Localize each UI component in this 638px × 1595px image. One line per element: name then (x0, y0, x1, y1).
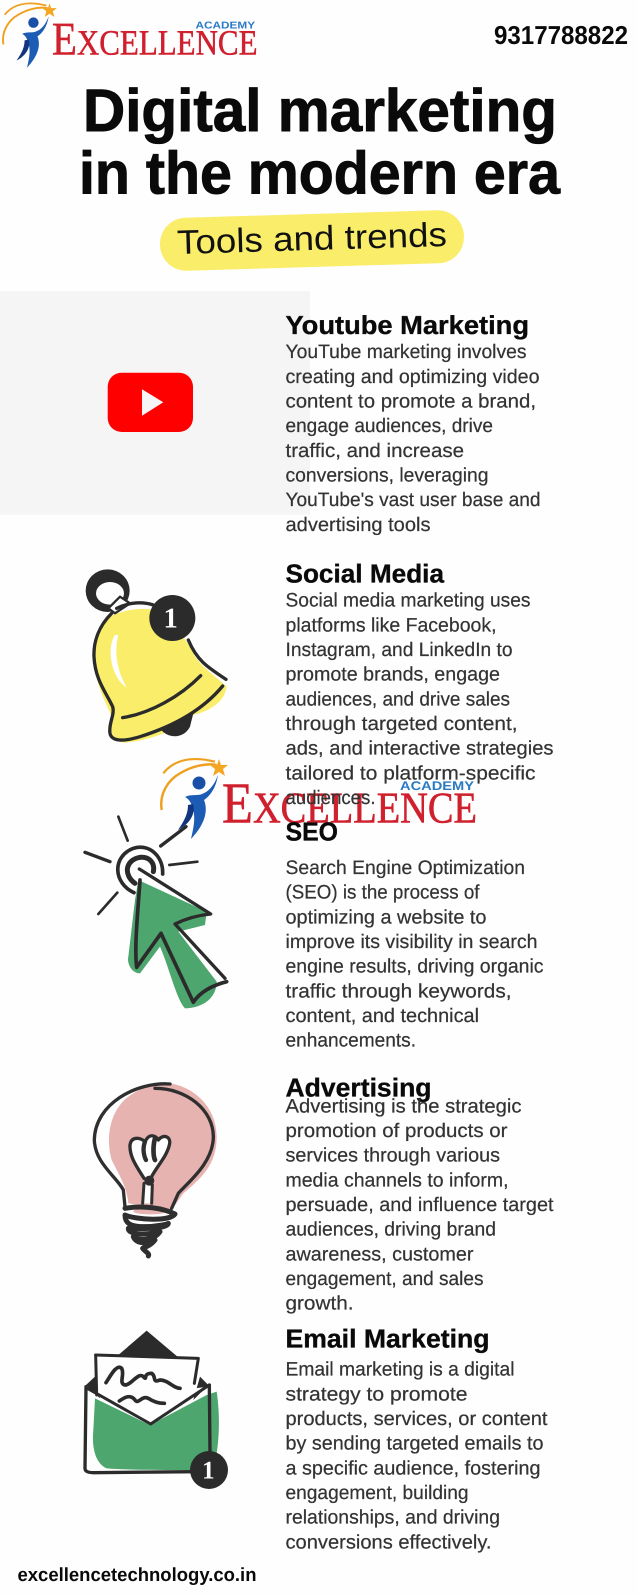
section: advertising (286, 1073, 554, 1315)
section: social media: promote brands, engage (286, 664, 500, 686)
panel: youtube icon background (0, 291, 310, 514)
section: seo (286, 817, 544, 1052)
section: youtube marketing: YouTube marketing involves (286, 341, 527, 363)
icon: bell: 1 (163, 602, 178, 634)
section: advertising: media channels to inform, (286, 1169, 508, 1191)
icon: cursor click (85, 817, 227, 1008)
phone number: 9317788822 (494, 20, 628, 50)
section: seo: optimizing a website to (286, 906, 487, 928)
section: youtube marketing: YouTube's vast user base and (286, 489, 540, 511)
section: advertising: audiences, driving brand (286, 1219, 496, 1241)
section: seo: Search Engine Optimization (286, 857, 525, 879)
section: seo: engine results, driving organic (286, 956, 544, 978)
section: seo: SEO (286, 817, 338, 847)
section: email marketing: products, services, or content (286, 1408, 548, 1430)
section: youtube marketing: advertising tools (286, 514, 431, 536)
section: social media: audiences. (286, 787, 376, 809)
section: email marketing: by sending targeted emails to (286, 1433, 544, 1455)
section: advertising: growth. (286, 1293, 354, 1315)
icon: light bulb (94, 1083, 217, 1256)
section: email marketing: Email Marketing (286, 1323, 490, 1353)
section: advertising: services through various (286, 1145, 500, 1167)
section: email marketing: Email marketing is a digital (286, 1359, 514, 1381)
logo: Excellence Academy top (3, 3, 258, 68)
title (79, 77, 561, 206)
section: social media: ads, and interactive strategies (286, 738, 554, 760)
logo watermark: Excellence Academy overlay (161, 759, 477, 839)
section: youtube marketing: traffic, and increase (286, 440, 464, 462)
section: social media: Social media marketing uses (286, 590, 531, 612)
section: seo: traffic through keywords, (286, 980, 512, 1002)
section: email marketing: a specific audience, fostering (286, 1457, 540, 1479)
section: advertising: engagement, and sales (286, 1268, 484, 1290)
section: advertising: promotion of products or (286, 1120, 508, 1142)
section: email marketing: relationships, and driving (286, 1507, 500, 1529)
icon: envelope (85, 1331, 228, 1489)
icon: envelope: 1 (202, 1456, 215, 1484)
subtitle pill (159, 210, 465, 271)
section: advertising: Advertising is the strategic (286, 1095, 522, 1117)
title: in the modern era (79, 140, 561, 206)
title: Digital marketing (83, 77, 557, 144)
section: seo: (SEO) is the process of (286, 882, 480, 904)
section: social media: Social Media (286, 558, 445, 588)
section: social media (286, 558, 554, 809)
section: email marketing (286, 1323, 548, 1553)
logo watermark: Excellence Academy overlay: ACADEMY (400, 779, 475, 793)
logo watermark: Excellence Academy overlay: EXCELLENCE (222, 771, 477, 836)
section: youtube marketing (286, 310, 540, 536)
section: social media: tailored to platform-specific (286, 762, 536, 784)
section: seo: improve its visibility in search (286, 931, 538, 953)
section: email marketing: conversions effectively. (286, 1531, 492, 1553)
logo: Excellence Academy top: ACADEMY (195, 19, 256, 31)
section: email marketing: engagement, building (286, 1482, 468, 1504)
section: youtube marketing: Youtube Marketing (286, 310, 529, 340)
section: youtube marketing: conversions, leveraging (286, 464, 488, 486)
footer website: excellencetechnology.co.in (18, 1565, 256, 1586)
section: social media: Instagram, and LinkedIn to (286, 639, 513, 661)
icon: youtube (108, 373, 193, 432)
section: youtube marketing: creating and optimizing video (286, 366, 540, 388)
section: advertising: Advertising (286, 1073, 432, 1103)
section: youtube marketing: engage audiences, drive (286, 415, 493, 437)
section: advertising: awareness, customer (286, 1243, 474, 1265)
section: social media: platforms like Facebook, (286, 614, 496, 636)
section: social media: through targeted content, (286, 713, 518, 735)
section: advertising: persuade, and influence target (286, 1194, 554, 1216)
icon: bell (86, 569, 227, 743)
section: seo: enhancements. (286, 1030, 416, 1052)
section: email marketing: strategy to promote (286, 1383, 468, 1405)
subtitle pill: Tools and trends (176, 216, 447, 262)
section: social media: audiences, and drive sales (286, 688, 510, 710)
logo: Excellence Academy top: EXCELLENCE (52, 13, 258, 65)
section: seo: content, and technical (286, 1005, 479, 1027)
section: youtube marketing: content to promote a brand, (286, 390, 536, 412)
